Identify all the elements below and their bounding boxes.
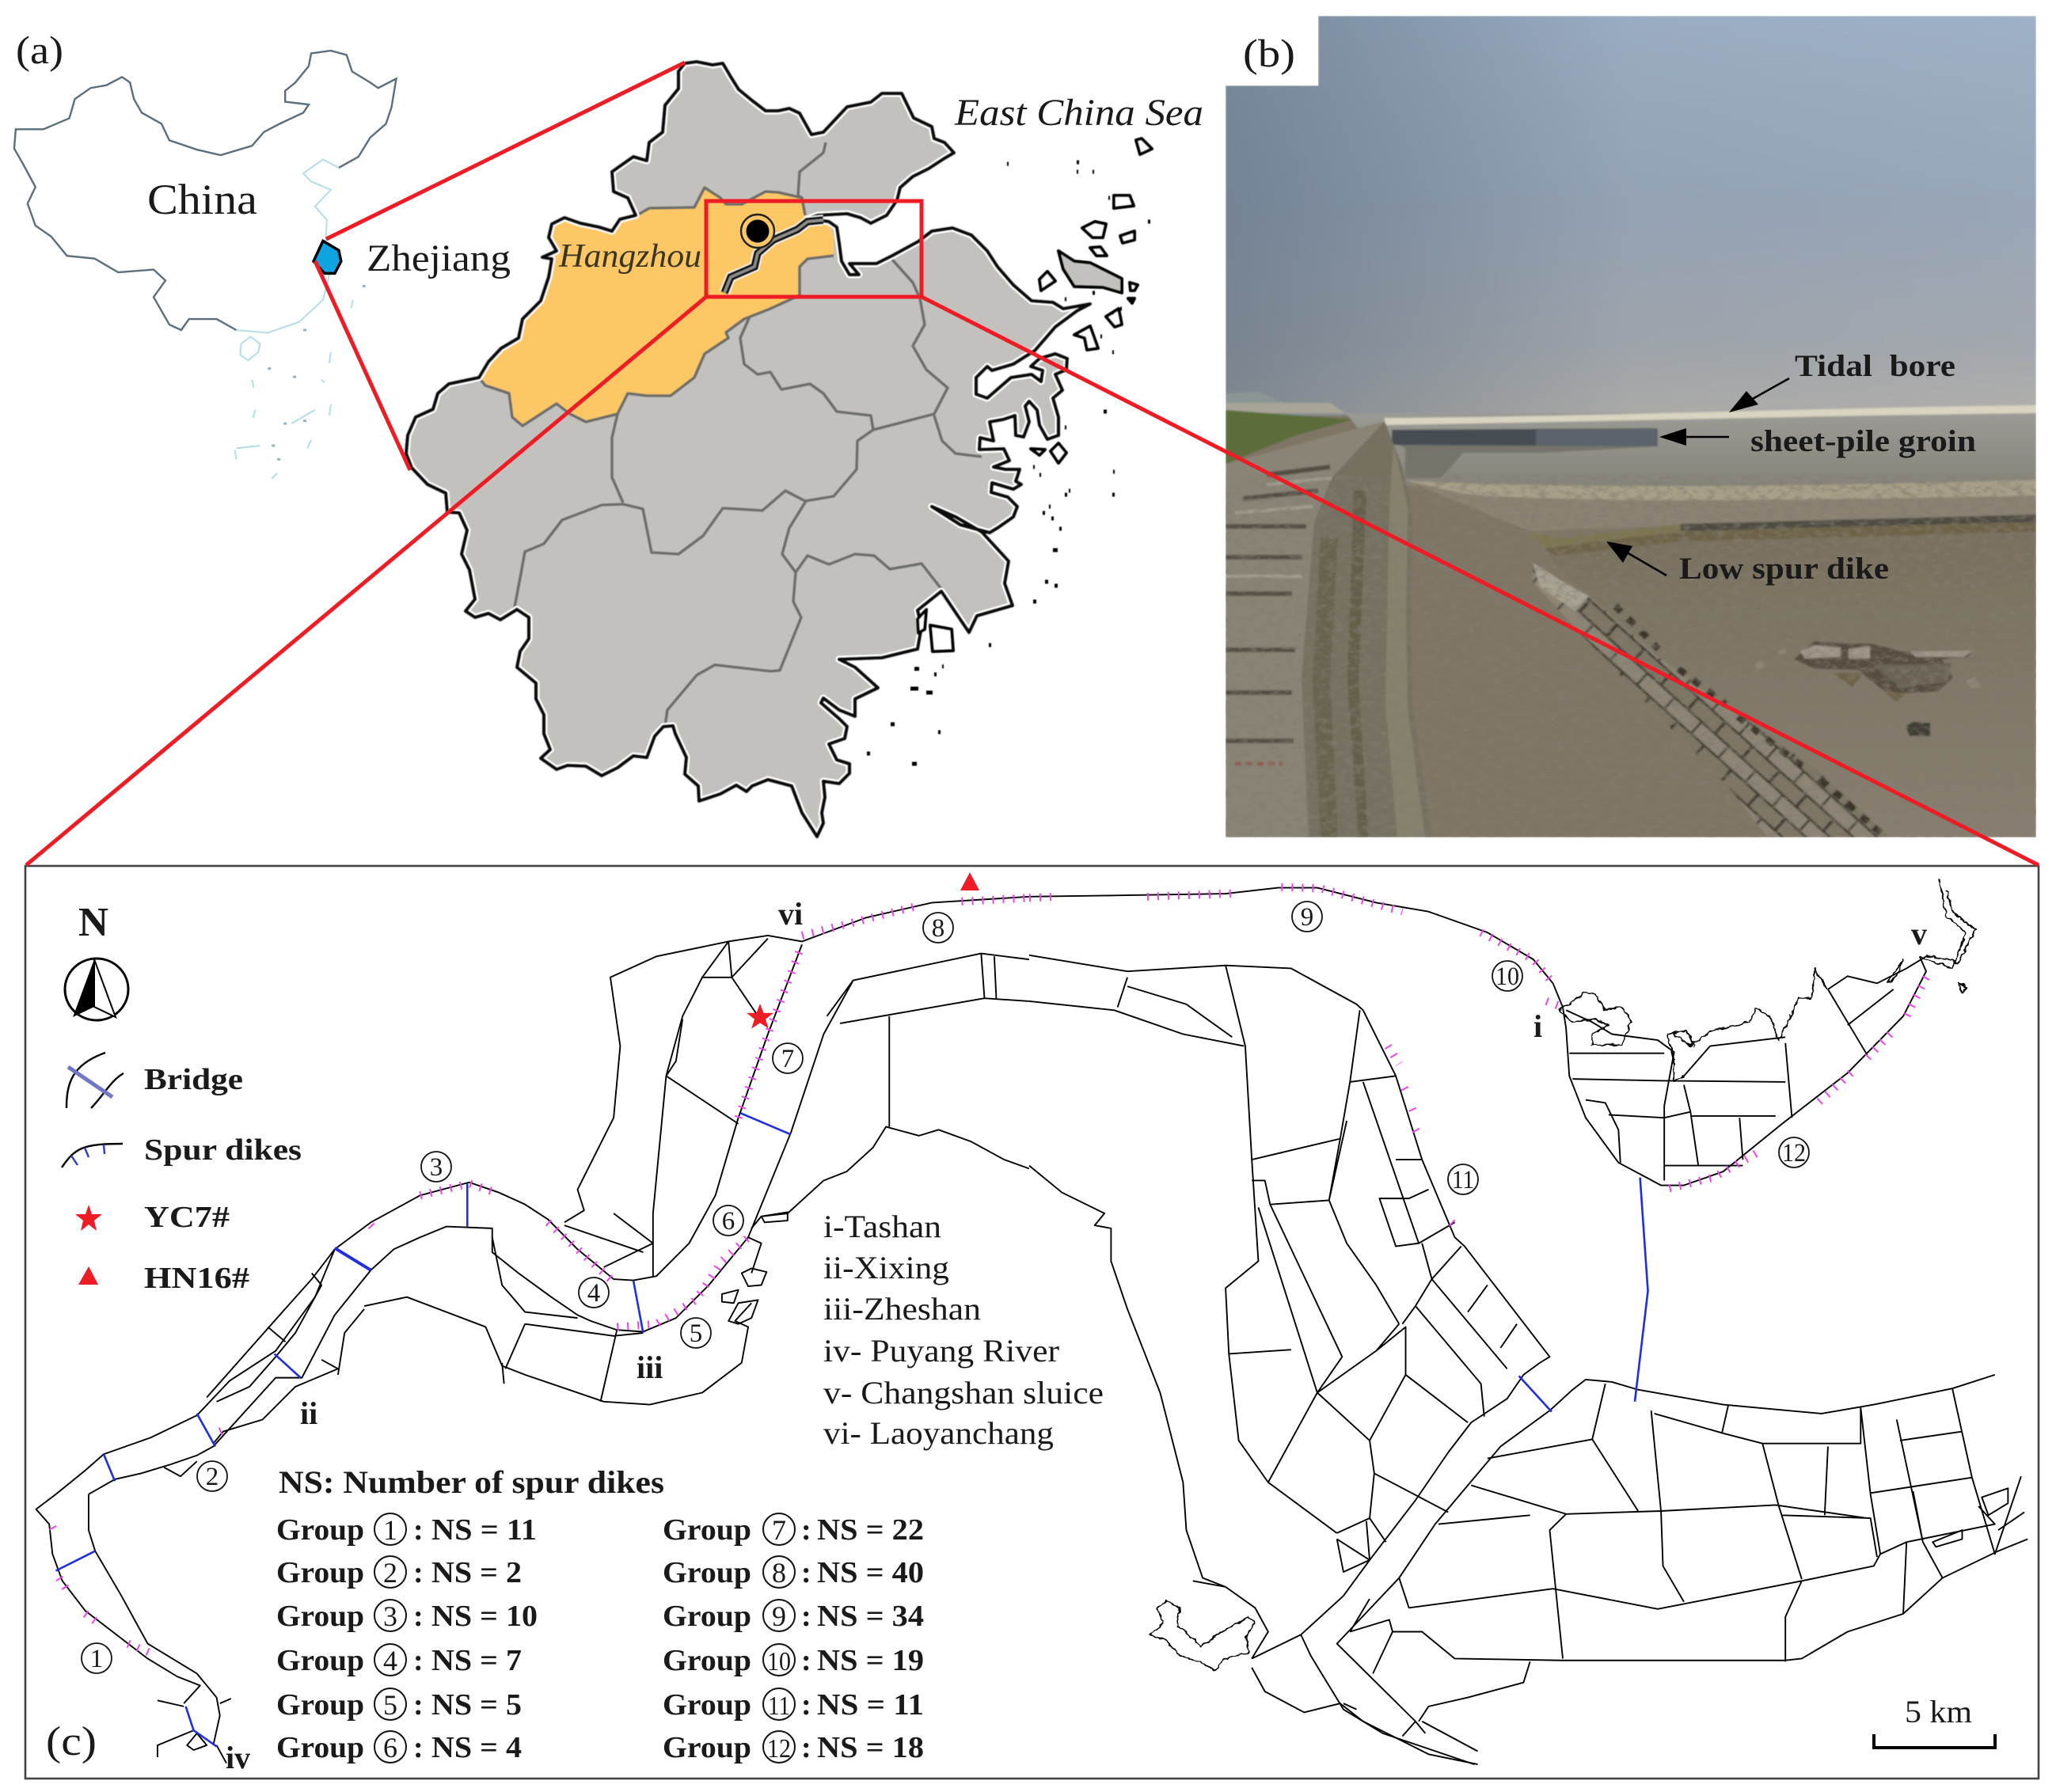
north arrow bbox=[65, 900, 128, 1020]
seawall top bbox=[1226, 421, 1385, 837]
place markers: ii bbox=[300, 1395, 317, 1431]
spur dike ticks bbox=[1029, 887, 1926, 1224]
NS groups 7 to 12: Group bbox=[663, 1644, 751, 1677]
NS groups 1 to 6: 5 bbox=[383, 1689, 397, 1721]
photo scene bbox=[1226, 16, 2036, 837]
label: Zhejiang: Zhejiang bbox=[367, 237, 511, 279]
riprap bbox=[1533, 563, 1890, 837]
label: East China Sea: East China Sea bbox=[954, 92, 1203, 134]
NS groups 7 to 12: 8 bbox=[772, 1557, 786, 1589]
scale bar bbox=[1874, 1694, 1995, 1748]
NS groups 1 to 6: : bbox=[413, 1644, 424, 1677]
NS groups 1 to 6: Group bbox=[276, 1644, 364, 1677]
NS groups 1 to 6: : bbox=[413, 1556, 424, 1589]
NS groups 1 to 6: Group bbox=[276, 1688, 364, 1722]
group circles on map: 2 bbox=[206, 1463, 219, 1491]
group circles on map: 11 bbox=[1452, 1166, 1474, 1194]
photo texture bbox=[1226, 475, 2036, 837]
place name list: i-Tashan bbox=[823, 1209, 941, 1244]
NS groups 1 to 6: : bbox=[413, 1731, 424, 1764]
coastline bbox=[406, 62, 1090, 837]
NS groups 1 to 6: : bbox=[413, 1600, 424, 1633]
NS groups 1 to 6 bbox=[276, 1513, 538, 1764]
place name list: v- Changshan sluice bbox=[823, 1375, 1104, 1410]
label: low spur dike: Low spur dike bbox=[1679, 552, 1889, 586]
NS groups 7 to 12: Group bbox=[663, 1556, 751, 1589]
spur dike ticks bbox=[52, 898, 1029, 1653]
group circles on map: 5 bbox=[690, 1319, 702, 1348]
NS groups 1 to 6: NS = 4 bbox=[431, 1731, 522, 1764]
map: China outline bbox=[14, 51, 396, 479]
NS groups 7 to 12: NS = 19 bbox=[817, 1644, 924, 1677]
panel b: photograph of tidal bore and spur dikes bbox=[1226, 16, 2036, 837]
label: panel a: (a) bbox=[16, 28, 63, 72]
place markers: v bbox=[1911, 916, 1927, 951]
label: Hangzhou: Hangzhou bbox=[558, 238, 701, 275]
NS groups 7 to 12: Group bbox=[663, 1688, 751, 1722]
place markers: vi bbox=[778, 896, 803, 932]
grass bbox=[1226, 410, 1353, 464]
group circles on map: 8 bbox=[932, 914, 944, 943]
NS groups 7 to 12: NS = 34 bbox=[817, 1600, 924, 1633]
group circles on map: 12 bbox=[1782, 1139, 1806, 1167]
legend: spur dikes bbox=[62, 1133, 302, 1167]
NS groups 7 to 12: : bbox=[801, 1731, 811, 1764]
legend: bridge bbox=[67, 1053, 243, 1108]
group circles on map: 9 bbox=[1301, 903, 1313, 932]
NS groups 7 to 12: NS = 11 bbox=[817, 1688, 924, 1722]
NS groups 7 to 12: : bbox=[801, 1688, 811, 1722]
icon: Zhejiang location on China map bbox=[314, 241, 341, 273]
river network: upstream section bbox=[36, 897, 1029, 1764]
NS groups 7 to 12 bbox=[663, 1513, 924, 1764]
legend: bridge: Bridge bbox=[144, 1063, 243, 1096]
NS groups 7 to 12: NS = 40 bbox=[817, 1556, 924, 1589]
wall stripes bbox=[1226, 467, 1330, 741]
legend: YC7#: YC7# bbox=[144, 1201, 230, 1234]
place markers: iv bbox=[226, 1740, 250, 1775]
NS groups 7 to 12: : bbox=[801, 1513, 811, 1547]
NS groups 1 to 6: 3 bbox=[383, 1600, 397, 1632]
NS groups 7 to 12: 11 bbox=[768, 1691, 790, 1721]
NS groups 7 to 12: : bbox=[801, 1600, 811, 1633]
group circles on map: 4 bbox=[587, 1279, 600, 1308]
river network: downstream section bbox=[1029, 879, 2027, 1764]
label: panel c: (c) bbox=[46, 1719, 97, 1764]
upstream sand bbox=[1411, 509, 1890, 837]
rocks bbox=[1832, 673, 1910, 702]
label: sheet-pile groin bbox=[1659, 424, 1976, 458]
NS groups 1 to 6: 2 bbox=[383, 1557, 397, 1589]
islands bbox=[867, 139, 1152, 764]
label: tidal bore: Tidal bore bbox=[1795, 349, 1955, 383]
zoom lines and inset box bbox=[26, 63, 2039, 865]
land bbox=[406, 62, 1090, 837]
place name list: vi- Laoyanchang bbox=[823, 1415, 1054, 1451]
place name list: iv- Puyang River bbox=[823, 1333, 1059, 1369]
legend: spur dikes: Spur dikes bbox=[144, 1133, 302, 1167]
marker: Hangzhou city bbox=[741, 215, 774, 248]
label: sheet-pile groin: sheet-pile groin bbox=[1750, 424, 1976, 458]
legend: HN16#: HN16# bbox=[144, 1262, 249, 1295]
place markers: iii bbox=[637, 1350, 663, 1385]
group circles on map: 6 bbox=[722, 1207, 735, 1236]
region: Hangzhou bbox=[479, 188, 834, 426]
group circles on map: 1 bbox=[90, 1645, 103, 1673]
place name list: ii-Xixing bbox=[823, 1250, 949, 1285]
NS groups 1 to 6: NS = 7 bbox=[431, 1644, 522, 1677]
NS groups 7 to 12: 10 bbox=[767, 1647, 791, 1676]
low spur dike bbox=[1530, 524, 1681, 549]
NS groups 1 to 6: Group bbox=[276, 1731, 364, 1764]
group circles on map bbox=[82, 902, 1809, 1673]
NS groups 7 to 12: : bbox=[801, 1644, 811, 1677]
NS groups 7 to 12: 9 bbox=[772, 1600, 786, 1632]
NS groups 7 to 12: NS = 22 bbox=[817, 1513, 924, 1547]
scale bar: 5 km bbox=[1905, 1694, 1972, 1729]
NS groups 7 to 12: 12 bbox=[767, 1734, 791, 1764]
NS groups 1 to 6: NS = 2 bbox=[431, 1556, 522, 1589]
north arrow: N bbox=[78, 900, 108, 945]
label: panel b: (b) bbox=[1243, 31, 1295, 75]
NS groups 1 to 6: Group bbox=[276, 1600, 364, 1633]
NS groups 7 to 12: NS = 18 bbox=[817, 1731, 924, 1764]
legend bbox=[62, 1053, 302, 1295]
NS table bbox=[276, 1464, 924, 1764]
place name list: iii-Zheshan bbox=[823, 1291, 981, 1327]
group circles on map: 3 bbox=[430, 1153, 443, 1182]
region outlines bbox=[479, 142, 982, 726]
NS groups 7 to 12: Group bbox=[663, 1600, 751, 1633]
NS groups 1 to 6: 1 bbox=[383, 1514, 397, 1546]
NS groups 1 to 6: NS = 10 bbox=[431, 1600, 538, 1633]
NS groups 7 to 12: 7 bbox=[772, 1514, 786, 1546]
NS groups 1 to 6: 6 bbox=[383, 1732, 397, 1764]
NS groups 7 to 12: : bbox=[801, 1556, 811, 1589]
place markers: i bbox=[1533, 1008, 1542, 1044]
seawall face bbox=[1302, 421, 1432, 837]
NS groups 1 to 6: : bbox=[413, 1688, 424, 1722]
NS groups 7 to 12: Group bbox=[663, 1731, 751, 1764]
group circles on map: 10 bbox=[1495, 962, 1519, 991]
NS groups 1 to 6: NS = 5 bbox=[431, 1688, 522, 1722]
group circles on map: 7 bbox=[781, 1045, 794, 1073]
place markers bbox=[226, 896, 1927, 1775]
label: tidal bore bbox=[1729, 349, 1955, 412]
bridges bbox=[55, 1113, 791, 1746]
Qiantang River bbox=[724, 220, 823, 293]
NS groups 1 to 6: Group bbox=[276, 1556, 364, 1589]
NS groups 7 to 12: Group bbox=[663, 1513, 751, 1547]
bridges bbox=[1519, 1178, 1648, 1412]
legend: HN16# bbox=[78, 1262, 249, 1295]
river bed fill bbox=[716, 223, 809, 305]
label: China: China bbox=[147, 176, 257, 223]
NS groups 1 to 6: Group bbox=[276, 1513, 364, 1547]
legend: YC7# bbox=[75, 1201, 230, 1234]
map: Zhejiang province bbox=[406, 62, 1152, 837]
NS groups 1 to 6: NS = 11 bbox=[431, 1513, 537, 1547]
place name list bbox=[823, 1209, 1104, 1451]
NS groups 1 to 6: 4 bbox=[383, 1645, 397, 1676]
panel c: estuary map bbox=[25, 866, 2039, 1779]
NS table: NS: Number of spur dikes bbox=[279, 1464, 664, 1500]
marker: HN16# station bbox=[960, 872, 979, 890]
label: low spur dike bbox=[1606, 541, 1889, 586]
frame bbox=[25, 866, 2039, 1779]
marker: YC7# station bbox=[747, 1004, 773, 1029]
NS groups 1 to 6: : bbox=[413, 1513, 424, 1547]
